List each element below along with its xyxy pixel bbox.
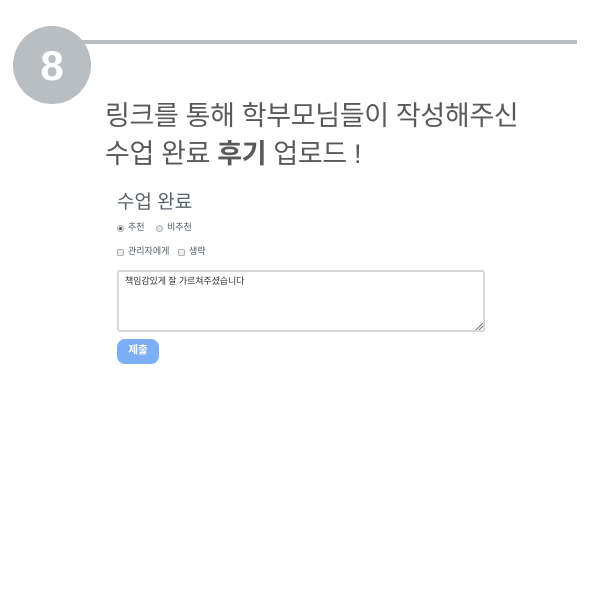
checkbox label: 생략 bbox=[189, 246, 206, 256]
radio button selected bbox=[117, 225, 124, 232]
review text: 책임감있게 잘 가르쳐주셨습니다 bbox=[125, 276, 244, 286]
step number badge: 8 bbox=[40, 42, 64, 89]
radio: not recommend bbox=[156, 222, 192, 232]
radio label: 추천 bbox=[128, 222, 145, 232]
radio button bbox=[156, 225, 163, 232]
checkbox: to admin bbox=[117, 246, 169, 256]
checkbox: omit bbox=[178, 246, 206, 256]
form title: 수업 완료 bbox=[117, 192, 192, 213]
heading line 2: 수업 완료 후기 업로드 ! bbox=[105, 139, 361, 169]
review textarea bbox=[117, 270, 485, 332]
submit button bbox=[117, 339, 159, 364]
heading line 1: 링크를 통해 학부모님들이 작성해주신 bbox=[105, 101, 518, 131]
step number badge bbox=[13, 26, 91, 104]
submit button: 제출 bbox=[128, 344, 148, 356]
radio label: 비추천 bbox=[167, 222, 192, 232]
heading bbox=[105, 101, 518, 169]
header rule bbox=[80, 40, 577, 44]
checkbox box bbox=[117, 249, 124, 256]
checkbox box bbox=[178, 249, 185, 256]
resize handle bbox=[476, 322, 483, 330]
checkbox label: 관리자에게 bbox=[128, 246, 169, 256]
